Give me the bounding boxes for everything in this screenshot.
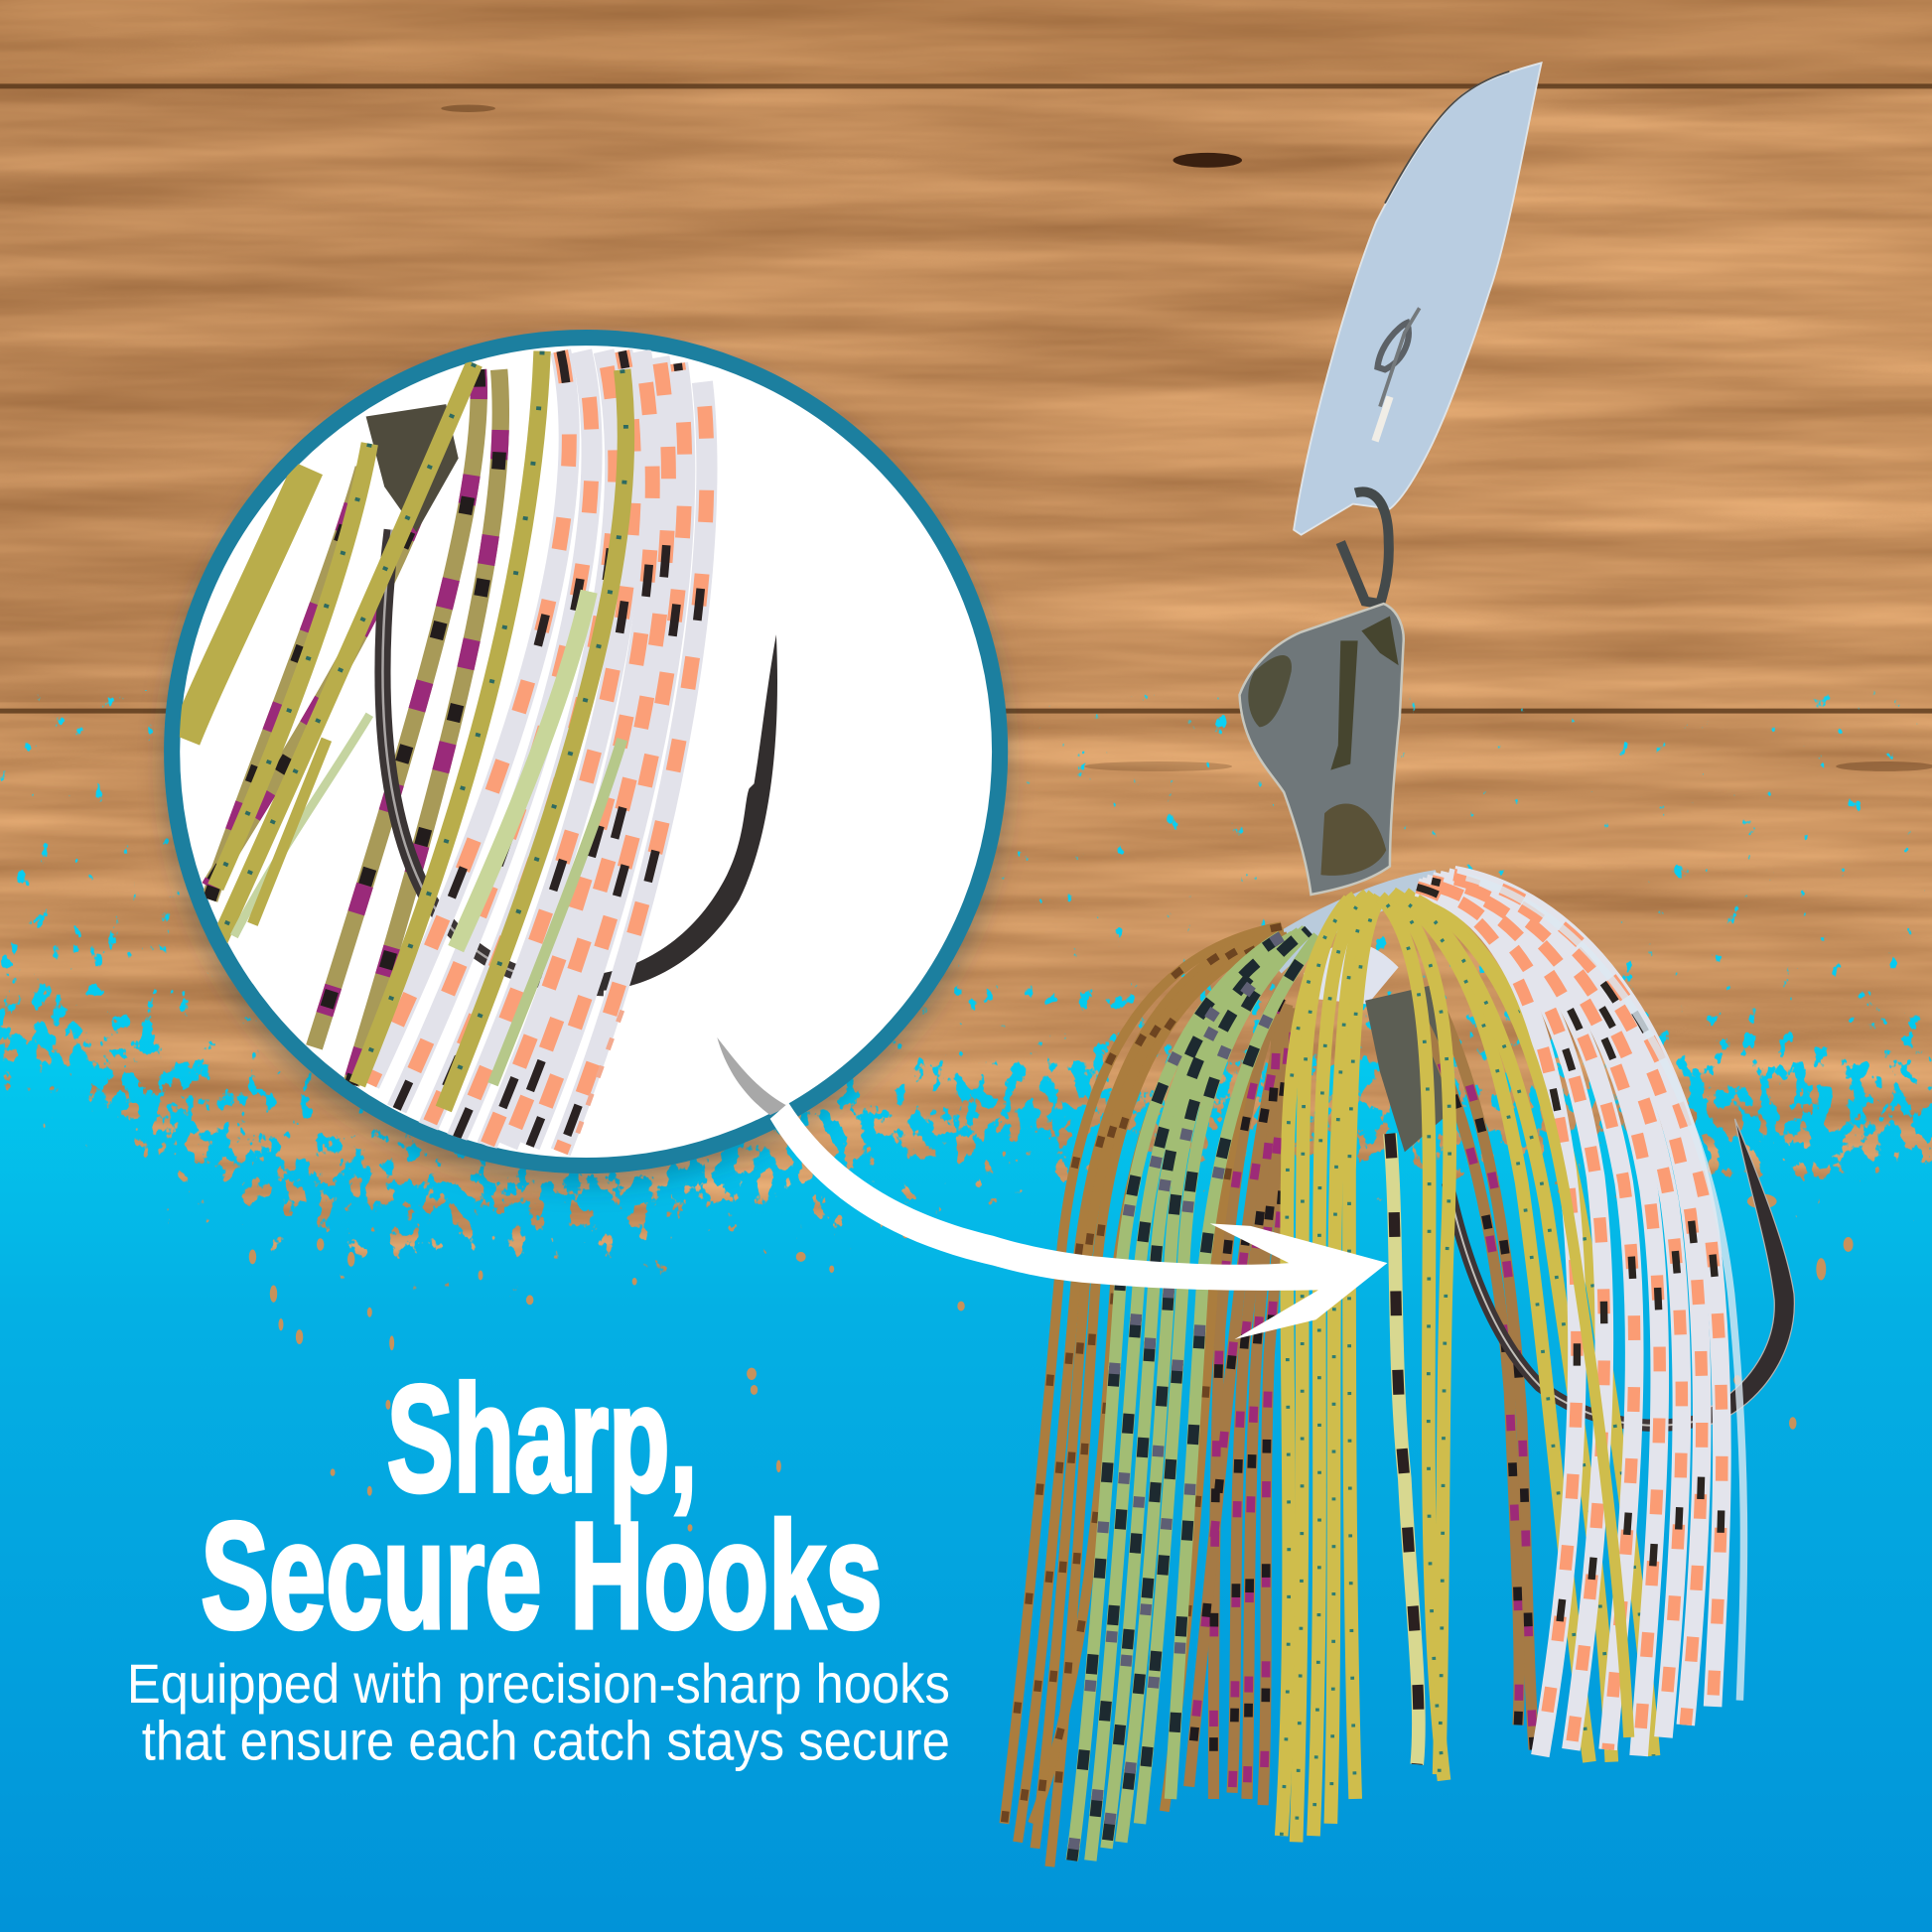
main lure: head — [1240, 604, 1404, 895]
main lure: spinner blade — [1294, 63, 1542, 604]
description text: Equipped with precision-sharp hooks — [127, 1652, 950, 1715]
heading: Secure Hooks — [201, 1491, 883, 1660]
main lure: hook — [1448, 1119, 1794, 1426]
description text: that ensure each catch stays secure — [142, 1709, 950, 1771]
heading: Sharp, — [387, 1355, 697, 1524]
description text — [127, 1652, 950, 1771]
main lure: skirt back strands — [1189, 942, 1534, 1805]
heading — [201, 1355, 883, 1660]
main lure: collar — [1257, 870, 1442, 973]
arrow pointing from lens to hook — [717, 1037, 1387, 1339]
water splash gradient — [0, 690, 1932, 1932]
lens content: skirt strands and hook — [185, 351, 777, 1152]
main lure: skirt front strands — [1004, 875, 1743, 1866]
zoom lens callout — [172, 338, 1000, 1166]
scattered wood flecks in water — [249, 1194, 1854, 1532]
